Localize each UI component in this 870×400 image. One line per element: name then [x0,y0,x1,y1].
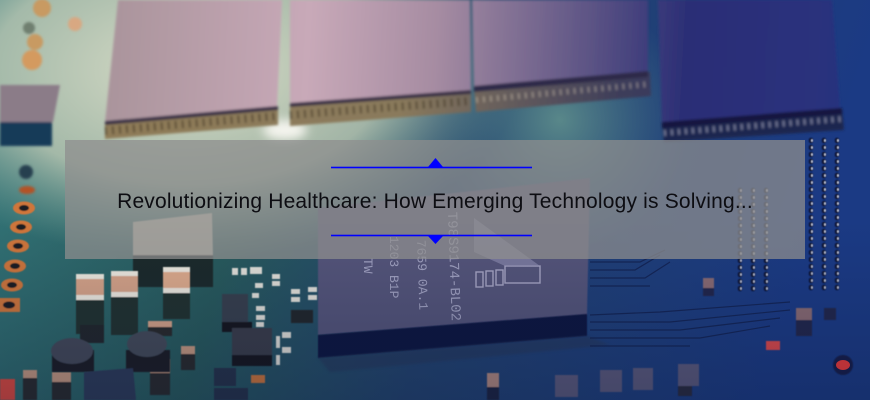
capacitors [23,267,195,400]
centre processor chip [318,178,610,372]
title: Revolutionizing Healthcare: How Emerging Technology is Solving... [117,190,753,213]
translucent title panel [65,140,805,259]
right side solder ball columns [740,140,838,290]
bottom and right components [487,278,836,400]
centre processor chip: 7659 0A.1 [413,240,430,311]
inductor block [133,213,213,287]
decorative blue rules with triangles [331,158,532,244]
centre processor chip: 1203 B1P [386,236,401,299]
top-left solder pads [19,0,82,194]
round coils [51,331,170,372]
top row of large chips [0,0,844,146]
centre processor chip: T98S9174-BL02 [443,212,463,321]
centre processor chip: TW [360,258,375,274]
small white SMD pads [232,267,317,365]
left edge orange via holes [0,202,35,400]
small IC packages [84,294,313,400]
red indicator light [833,355,853,375]
circuit traces [590,250,790,346]
